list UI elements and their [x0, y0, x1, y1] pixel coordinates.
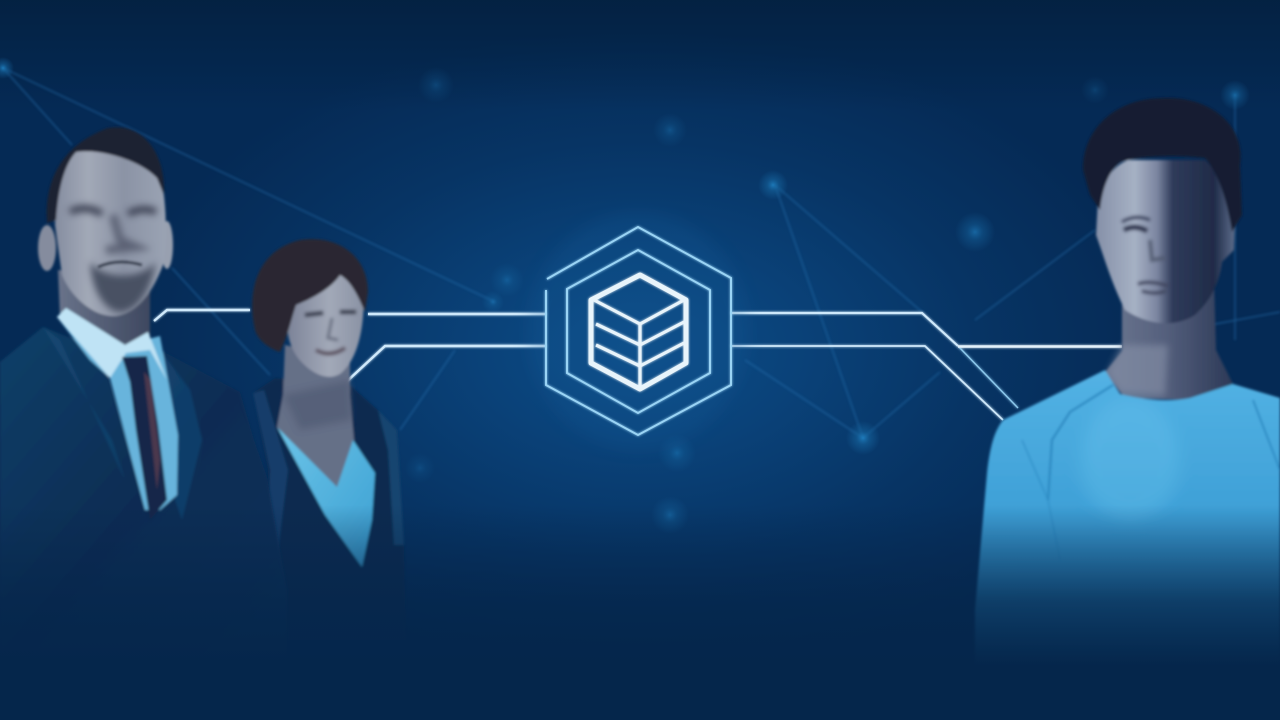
- blazer: [253, 378, 406, 640]
- neck highlight: [1108, 345, 1168, 396]
- person: woman in light blue shirt: [975, 98, 1280, 670]
- cube: [591, 275, 686, 389]
- face: [1096, 160, 1235, 323]
- face: [55, 147, 166, 316]
- outer hexagon: [546, 227, 731, 435]
- neck: [58, 270, 150, 355]
- chest shading: [283, 380, 352, 430]
- ears: [38, 225, 56, 271]
- facial features: [1122, 217, 1168, 293]
- circuit lines: left: [154, 310, 546, 384]
- facial features: [305, 312, 356, 354]
- person: woman in dark blazer: [252, 239, 406, 640]
- shirt: [975, 370, 1280, 670]
- tie: [122, 356, 167, 520]
- highlight on chest: [1080, 400, 1180, 520]
- hair: [47, 127, 164, 223]
- neck: [1105, 280, 1233, 400]
- network nodes: [0, 57, 1250, 534]
- circuit lines: right: [731, 313, 1122, 420]
- network lines: [3, 68, 1280, 438]
- facial features: [70, 208, 156, 312]
- bottom fade: [0, 505, 1280, 720]
- person: man in dark suit: [0, 127, 287, 660]
- inner hexagon: [567, 250, 710, 413]
- neck and chest: [277, 345, 354, 490]
- jacket: [0, 327, 287, 660]
- blouse: [277, 427, 375, 567]
- icon: hexagon data cube: [528, 213, 748, 449]
- hair: [1083, 98, 1242, 232]
- mouth: [98, 262, 142, 267]
- hair: [252, 239, 368, 352]
- shirt: [57, 308, 178, 510]
- face: [287, 274, 364, 377]
